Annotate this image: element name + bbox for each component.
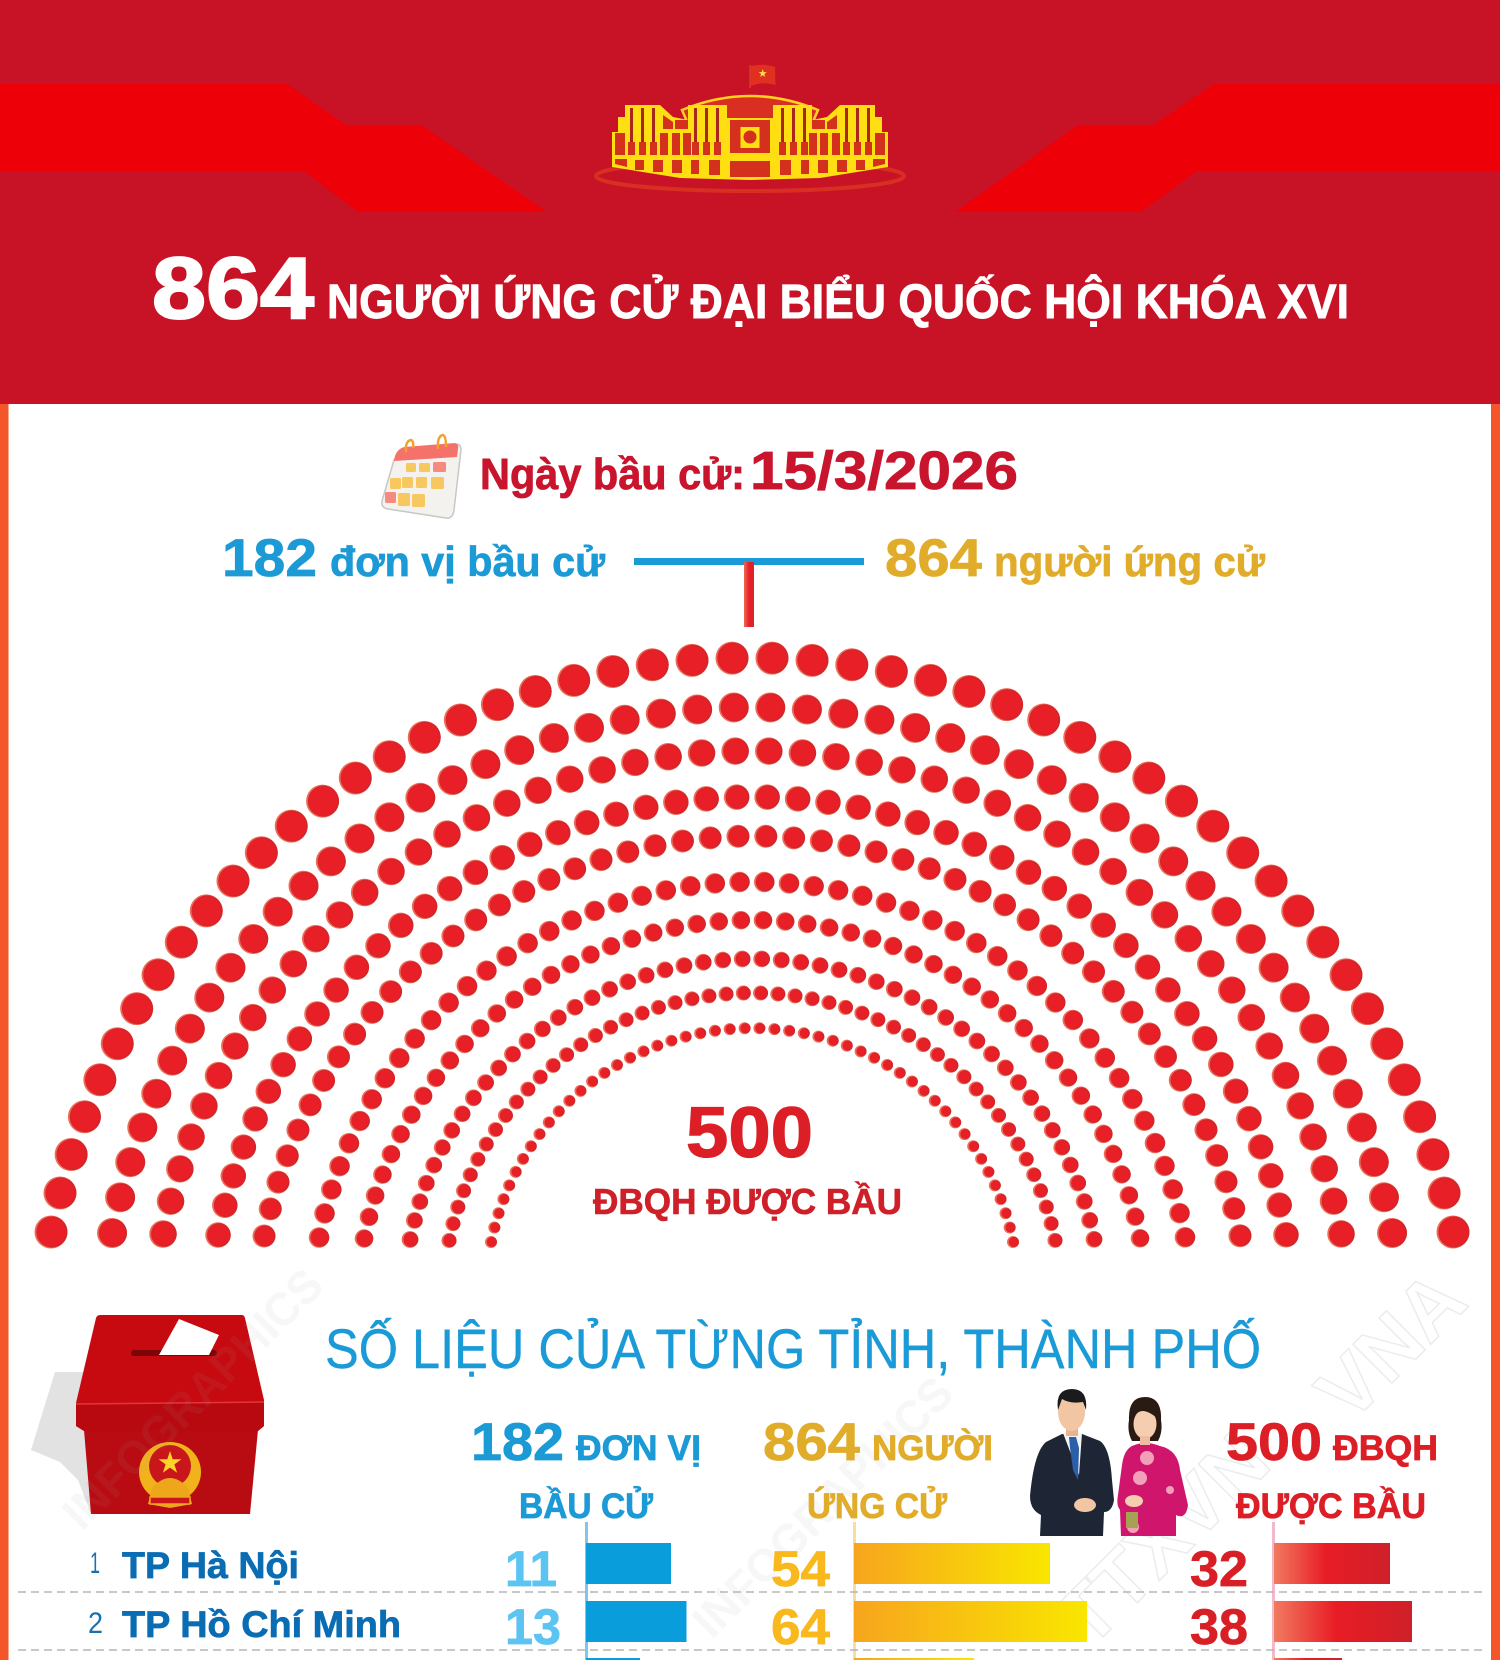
side border right — [1491, 404, 1500, 1660]
emblem — [139, 1442, 201, 1508]
dots: red layer — [51, 658, 1468, 1246]
watermarks: infographics: INFOGRAPHICS — [52, 1258, 333, 1539]
column header: elected deputies — [1226, 1413, 1438, 1526]
ribbon right — [955, 84, 1500, 212]
stat: 864 candidates: người ứng cử — [994, 538, 1266, 585]
column header: constituencies: BẦU CỬ — [519, 1486, 654, 1526]
table row: TP Hồ Chí Minh: 38 — [1190, 1599, 1248, 1655]
side border left — [0, 404, 8, 1660]
dots: light layer — [51, 658, 1470, 1248]
flag — [750, 65, 776, 88]
table row: TP Hà Nội — [90, 1541, 1390, 1597]
table row: partial third row — [586, 1658, 1342, 1660]
watermarks: agency outline: VNA — [1299, 1254, 1482, 1437]
icon: National Assembly building — [596, 65, 904, 191]
watermarks: agency outline: TTXVN — [1039, 1415, 1286, 1660]
label: 500 deputies elected: 500 — [686, 1094, 813, 1173]
connector: blue line — [634, 558, 864, 565]
column header: constituencies — [471, 1413, 701, 1526]
column header: candidates: 864 — [763, 1413, 861, 1472]
column header: elected deputies: ĐƯỢC BẦU — [1236, 1486, 1426, 1526]
chart: hemicycle of 500 seats — [51, 658, 1470, 1248]
title text: NGƯỜI ỨNG CỬ ĐẠI BIỂU QUỐC HỘI KHÓA XVI — [327, 274, 1349, 329]
stat: 864 candidates: 864 — [885, 529, 983, 588]
woman — [1117, 1397, 1188, 1536]
table row: TP Hà Nội: 11 — [505, 1541, 557, 1597]
label: 500 deputies elected: ĐBQH ĐƯỢC BẦU — [593, 1181, 902, 1222]
column header: elected deputies: ĐBQH — [1333, 1429, 1438, 1468]
column header: elected deputies: 500 — [1226, 1413, 1322, 1472]
stat: 182 constituencies: 182 — [222, 529, 317, 588]
table row: TP Hồ Chí Minh: 13 — [505, 1599, 561, 1655]
date label: Ngày bầu cử: — [480, 450, 745, 499]
stat: 182 constituencies: đơn vị bầu cử — [330, 538, 606, 585]
axis: constituencies — [585, 1522, 588, 1660]
label: 500 deputies elected — [593, 1094, 902, 1222]
watermarks: infographics: INFOGRAPHICS — [682, 1366, 963, 1647]
table row: TP Hồ Chí Minh — [88, 1599, 1412, 1655]
man — [1030, 1389, 1114, 1536]
table row: TP Hà Nội: 32 — [1190, 1541, 1248, 1597]
watermarks: infographics — [52, 1258, 963, 1647]
ribbon left — [0, 84, 547, 212]
stat: 864 candidates — [885, 529, 1266, 588]
table row: TP Hà Nội: 1 — [90, 1547, 100, 1580]
table row: TP Hà Nội: TP Hà Nội — [122, 1545, 299, 1586]
axis: candidates — [853, 1522, 856, 1660]
icon: calendar — [382, 435, 461, 518]
column header: candidates: ỨNG CỬ — [807, 1486, 948, 1526]
stat: 182 constituencies — [222, 529, 606, 588]
column header: candidates: NGƯỜI — [872, 1428, 993, 1468]
icon: ballot box — [31, 1315, 264, 1514]
title — [152, 240, 1349, 337]
title number: 864 — [152, 240, 314, 337]
election date — [480, 441, 1018, 501]
connector: red stem — [744, 562, 754, 627]
panel: header band — [0, 0, 1500, 404]
table row: TP Hà Nội: 54 — [771, 1541, 830, 1597]
column header: constituencies: ĐƠN VỊ — [576, 1429, 701, 1468]
date value: 15/3/2026 — [750, 441, 1018, 501]
axis: elected — [1272, 1522, 1275, 1660]
table row: TP Hồ Chí Minh: 2 — [88, 1607, 103, 1640]
column header: constituencies: 182 — [471, 1413, 564, 1472]
column header: candidates — [763, 1413, 993, 1526]
icon: candidates illustration — [1030, 1389, 1188, 1536]
watermarks: agency outline — [1039, 1254, 1482, 1660]
table row: TP Hồ Chí Minh: 64 — [771, 1599, 830, 1655]
heading: province data: SỐ LIỆU CỦA TỪNG TỈNH, THÀNH PHỐ — [325, 1317, 1261, 1380]
dots: dark layer — [52, 658, 1469, 1248]
table row: TP Hồ Chí Minh: TP Hồ Chí Minh — [122, 1604, 401, 1645]
